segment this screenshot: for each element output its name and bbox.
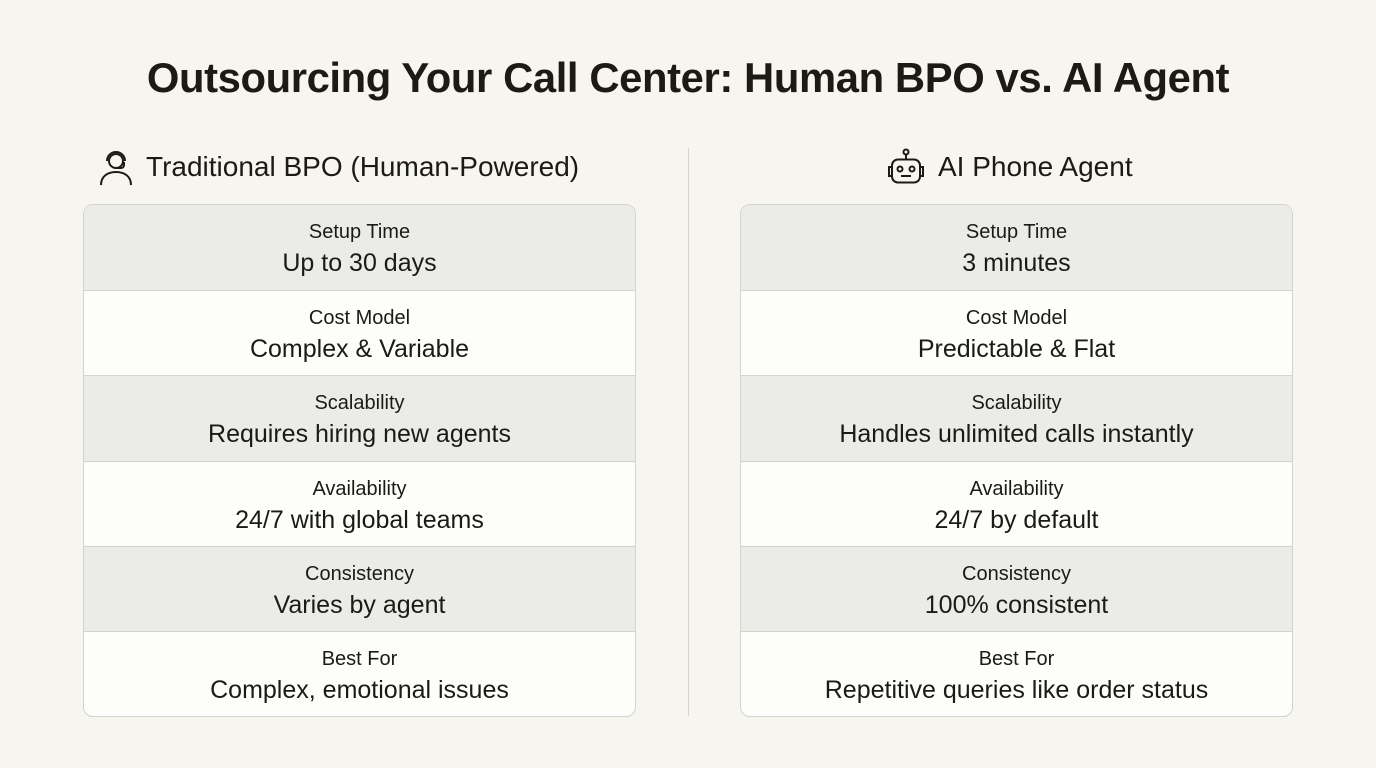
panel: AI agent table: [740, 204, 1293, 717]
panel: AI agent table: Consistency: [962, 563, 1071, 585]
panel: AI agent table: 3 minutes: [962, 249, 1071, 277]
panel: traditional BPO table: Scalability: [314, 392, 405, 414]
panel: traditional BPO table: 24/7 with global teams: [235, 506, 484, 534]
title: Outsourcing Your Call Center: Human BPO vs. AI Agent: [147, 54, 1229, 101]
panel: AI agent table: Cost Model: [966, 307, 1067, 329]
panel: AI agent table: Setup Time: [966, 221, 1067, 243]
panel: AI agent table: Scalability: [971, 392, 1062, 414]
icon: headset person: [100, 151, 132, 185]
panel: AI agent table: Predictable & Flat: [918, 335, 1115, 363]
panel: AI agent table: 24/7 by default: [934, 506, 1098, 534]
panel: traditional BPO table: Consistency: [305, 563, 414, 585]
panel: AI agent table: Handles unlimited calls instantly: [839, 420, 1194, 448]
panel: traditional BPO table: Up to 30 days: [282, 249, 437, 277]
panel: AI agent table: Repetitive queries like order status: [825, 676, 1208, 704]
panel: traditional BPO table: Requires hiring new agents: [208, 420, 511, 448]
icon: robot: [888, 148, 924, 184]
heading: AI agent: AI Phone Agent: [938, 151, 1133, 182]
panel: traditional BPO table: Best For: [322, 648, 397, 670]
panel: traditional BPO table: Complex, emotional issues: [210, 676, 509, 704]
panel: traditional BPO table: Availability: [312, 478, 407, 500]
panel: traditional BPO table: Setup Time: [309, 221, 410, 243]
heading: traditional BPO: Traditional BPO (Human-Powered): [146, 151, 579, 182]
panel: traditional BPO table: Varies by agent: [274, 591, 445, 619]
panel: traditional BPO table: Cost Model: [309, 307, 410, 329]
panel: AI agent table: 100% consistent: [925, 591, 1108, 619]
panel: traditional BPO table: Complex & Variable: [250, 335, 469, 363]
panel: AI agent table: Best For: [979, 648, 1054, 670]
panel: AI agent table: Availability: [969, 478, 1064, 500]
panel: traditional BPO table: [83, 204, 636, 717]
